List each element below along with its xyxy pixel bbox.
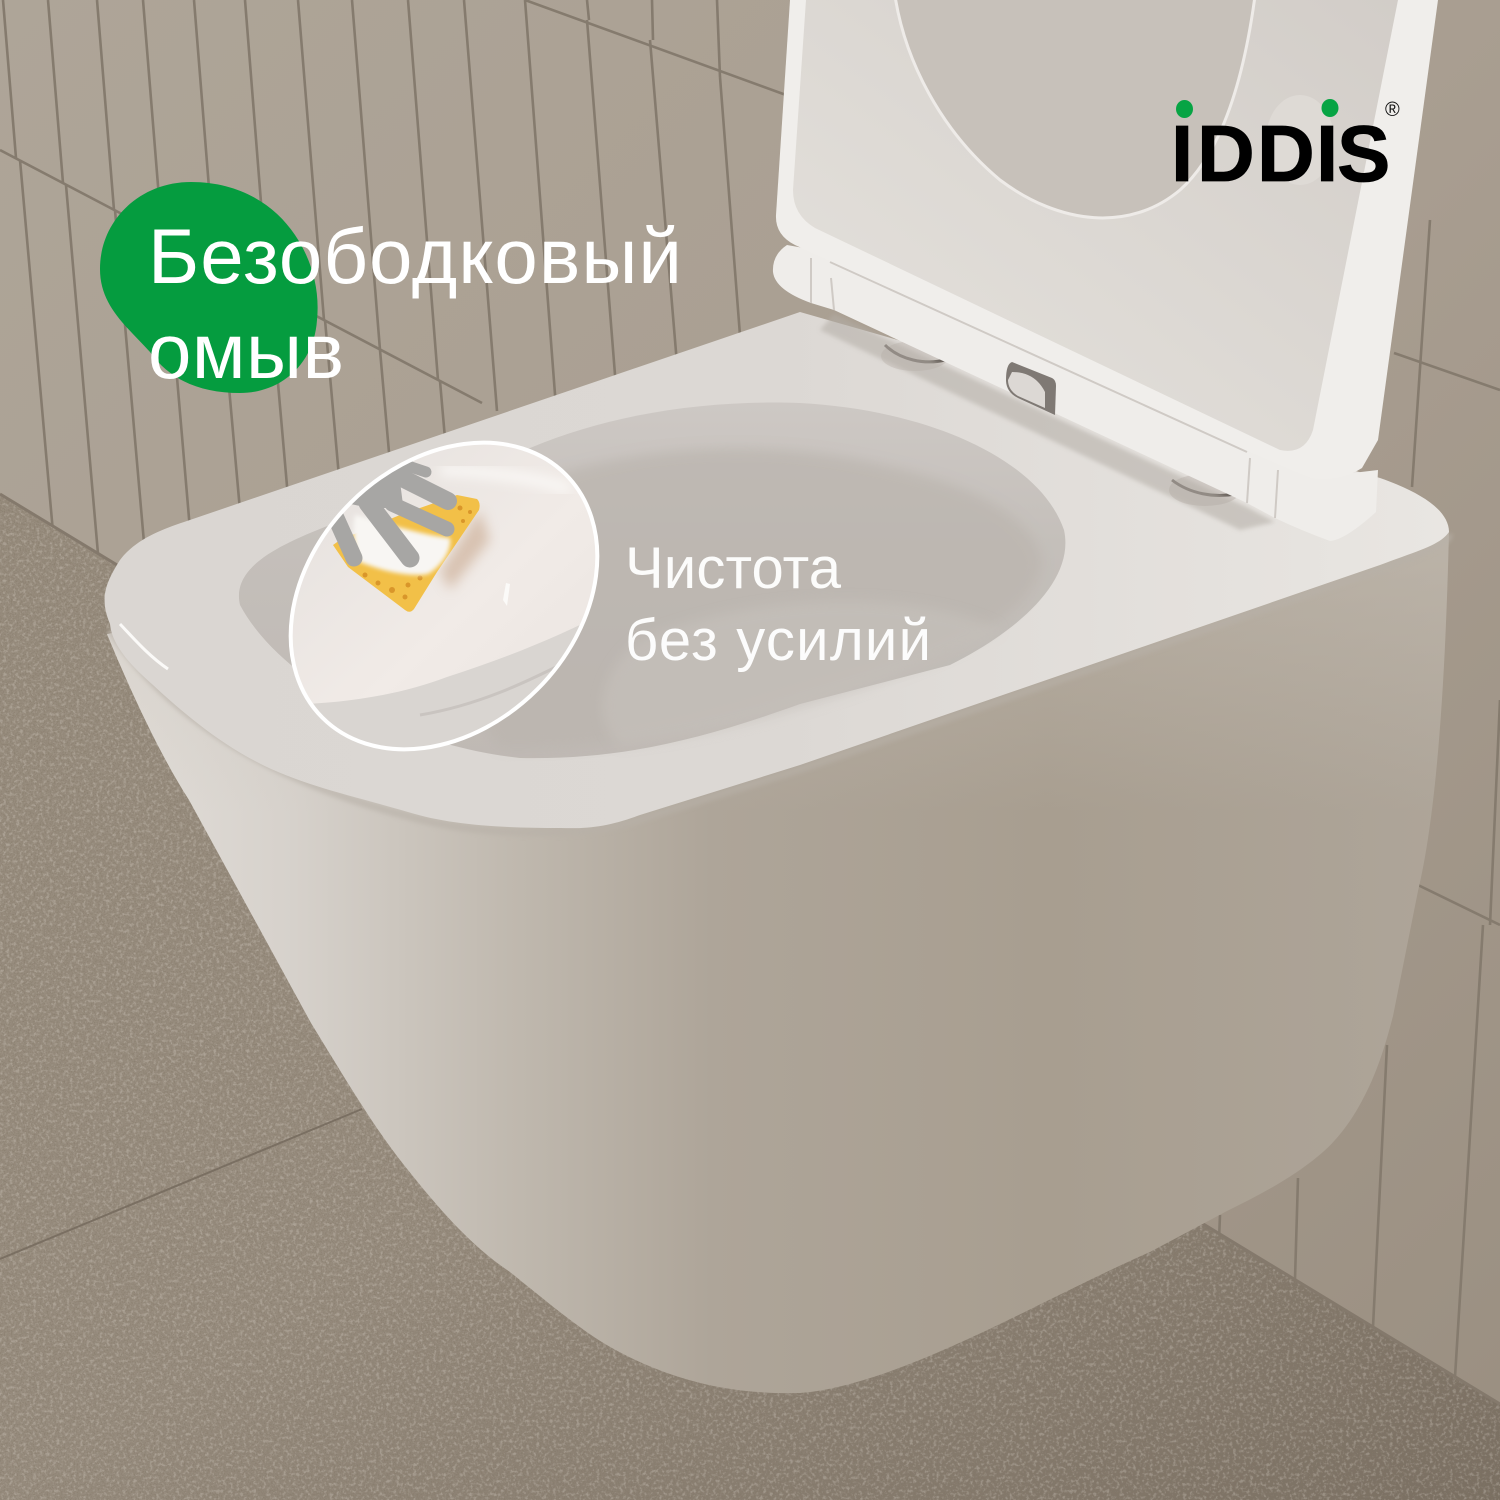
foam [353,515,450,575]
lid bumper [1266,95,1334,185]
hinge bar [773,245,1378,541]
title: омыв [148,307,344,395]
floor [0,490,1500,1500]
lens glint [503,583,510,606]
toilet seat lid [773,0,1438,541]
glove [336,465,448,558]
registered mark: ® [1385,99,1400,121]
rim highlight [120,624,168,669]
toilet rim [105,312,1449,832]
lid outer [776,0,1438,479]
lower rim band [313,625,580,748]
subtitle: без усилий [625,608,931,673]
title: Безободковый [148,212,682,300]
logo: IDDIS: IDDIS [1171,109,1390,198]
subtitle [625,536,931,673]
lid inner panel [793,0,1398,451]
lid opening [895,0,1255,218]
release button [1006,362,1056,415]
title [148,212,682,395]
callout: cleaning detail circle [288,440,600,752]
sponge [333,495,480,612]
toilet body [107,500,1449,1393]
green accent blob [100,182,318,393]
sponge shadow [440,510,490,590]
logo dots [1176,99,1338,118]
seat hinge mounts [881,341,1241,506]
subtitle: Чистота [625,536,842,601]
hinge shadow [820,314,1275,530]
toilet bowl [239,403,1065,758]
